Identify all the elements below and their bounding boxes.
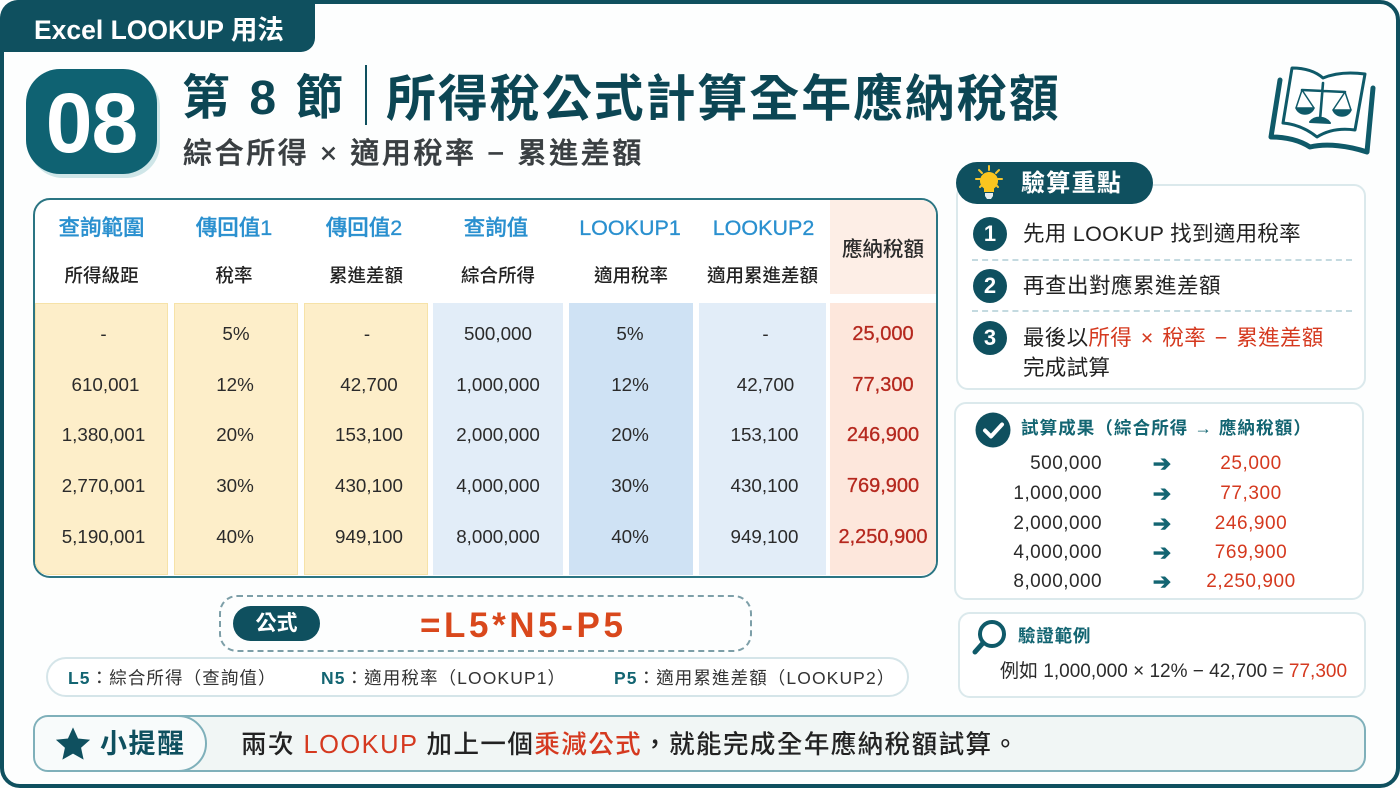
header: 查詢範圍: 查詢範圍 [58, 216, 144, 240]
icon: magnifier [972, 620, 1006, 654]
column: progressive differences: 153,100 [335, 424, 403, 445]
column: income brackets: 1,380,001 [62, 424, 145, 445]
label text: 小提醒 [100, 729, 186, 759]
column: progressive differences: 430,100 [335, 475, 403, 496]
column: income brackets: 610,001 [72, 374, 139, 395]
incomes: 2,000,000 [1013, 513, 1102, 534]
result rows [1013, 451, 1296, 594]
tax values: 2,250,900 [1206, 571, 1296, 592]
header: LOOKUP1: LOOKUP1 [579, 216, 681, 240]
column: tax payable: 769,900 [847, 475, 919, 497]
header: 查詢值: 查詢值 [464, 216, 528, 240]
step 3 [973, 321, 1324, 380]
column: gross income [433, 303, 563, 575]
tax values: 77,300 [1220, 483, 1282, 504]
column: gross income: 2,000,000 [456, 424, 540, 445]
column: income brackets: 2,770,001 [62, 475, 145, 496]
arrows [1153, 451, 1171, 594]
subheader: 綜合所得: 綜合所得 [461, 265, 535, 286]
column: income brackets: - [100, 323, 107, 344]
step number 3: 3 [984, 325, 996, 350]
formula tag: 公式 [256, 612, 298, 635]
verification heading pill [956, 162, 1153, 204]
header: 應納稅額: 應納稅額 [842, 238, 924, 261]
column: gross income: 8,000,000 [456, 526, 540, 547]
header tab [0, 0, 315, 52]
example heading: 驗證範例 [1018, 626, 1091, 646]
step text 3 second line: 完成試算 [1023, 356, 1110, 380]
step number 1 [973, 217, 1007, 251]
tax values: 769,900 [1215, 542, 1287, 563]
example calculation: 例如 1,000,000 × 12% − 42,700 = 77,300 [1000, 661, 1347, 682]
icon: check circle [976, 412, 1010, 448]
panel: verification example [958, 612, 1366, 698]
column: lookup rate: 5% [616, 323, 644, 344]
panel: verification points [956, 184, 1366, 390]
column: tax payable: 25,000 [852, 323, 914, 345]
step text 3: 最後以所得 × 稅率 − 累進差額 [1023, 326, 1324, 350]
legend L5: L5：綜合所得（查詢值） [68, 668, 277, 688]
arrows: ➔ [1153, 540, 1171, 565]
header: LOOKUP2: LOOKUP2 [713, 216, 814, 240]
column: gross income: 500,000 [464, 323, 532, 344]
column: progressive differences: - [364, 323, 370, 344]
column headers [58, 216, 924, 286]
tax values: 246,900 [1215, 513, 1287, 534]
section number badge [26, 69, 157, 174]
incomes: 500,000 [1030, 453, 1102, 474]
icon: light bulb [975, 165, 1003, 199]
heading text: 驗算重點 [1021, 170, 1122, 197]
reminder bar [33, 715, 1366, 772]
formula legend [46, 657, 909, 697]
column: tax payable: 77,300 [852, 374, 914, 396]
column: lookup rate [569, 303, 693, 575]
column: progressive differences [304, 303, 428, 575]
step number 1: 1 [984, 221, 996, 246]
subheader: 適用累進差額: 適用累進差額 [707, 265, 818, 286]
tab label: Excel LOOKUP 用法 [34, 15, 284, 45]
title: main: 所得稅公式計算全年應納稅額 [386, 71, 1061, 127]
column: tax payable: 2,250,900 [838, 526, 927, 548]
column: tax rates: 20% [216, 424, 254, 445]
legend P5: P5：適用累進差額（LOOKUP2） [614, 668, 895, 688]
header: 傳回值2: 傳回值2 [326, 216, 402, 240]
column: income brackets: 5,190,001 [62, 526, 145, 547]
subtitle: 綜合所得 × 適用稅率 − 累進差額 [183, 138, 644, 170]
formula box [219, 595, 752, 652]
incomes [1013, 453, 1102, 592]
step number 3 [973, 321, 1007, 355]
title: section: 第 8 節 [182, 72, 346, 125]
formula expression: =L5*N5-P5 [420, 606, 627, 645]
arrows: ➔ [1153, 451, 1171, 476]
reminder label [33, 715, 207, 772]
tax amount header background [830, 200, 936, 294]
column: tax rates: 30% [216, 475, 254, 496]
icon: law book with scales [1268, 66, 1376, 154]
step number 2 [973, 269, 1007, 303]
subheader: 稅率: 稅率 [215, 265, 252, 286]
incomes: 4,000,000 [1013, 542, 1102, 563]
column: tax rates [174, 303, 298, 575]
column: tax rates: 40% [216, 526, 254, 547]
column: lookup difference [699, 303, 826, 575]
column: tax rates: 12% [216, 374, 254, 395]
column: tax rates: 5% [222, 323, 250, 344]
column: lookup difference: 949,100 [731, 526, 798, 547]
reminder text: 兩次 LOOKUP 加上一個乘減公式，就能完成全年應納稅額試算。 [241, 731, 1019, 759]
header: 傳回值1: 傳回值1 [196, 216, 272, 240]
column: lookup rate: 20% [611, 424, 649, 445]
column: lookup difference: 42,700 [737, 374, 794, 395]
arrows: ➔ [1153, 511, 1171, 536]
arrows: ➔ [1153, 569, 1171, 594]
column: gross income: 1,000,000 [456, 374, 540, 395]
step text 2: 再查出對應累進差額 [1023, 274, 1221, 298]
column: lookup difference: - [762, 323, 769, 344]
column: tax payable [830, 303, 936, 575]
step 1 [973, 217, 1301, 251]
arrows: ➔ [1153, 481, 1171, 506]
panel: results [954, 402, 1364, 600]
incomes: 1,000,000 [1013, 483, 1102, 504]
title divider [365, 65, 367, 125]
legend N5: N5：適用稅率（LOOKUP1） [321, 668, 566, 688]
step number 2: 2 [984, 273, 996, 298]
results heading: 試算成果（綜合所得 → 應納稅額） [1021, 418, 1312, 438]
step 2 [973, 269, 1221, 303]
panel: lookup table [33, 198, 938, 578]
step text 1: 先用 LOOKUP 找到適用稅率 [1023, 222, 1301, 246]
column: income brackets [35, 303, 168, 575]
incomes: 8,000,000 [1013, 571, 1102, 592]
column: lookup rate: 40% [611, 526, 649, 547]
column: lookup difference: 430,100 [731, 475, 798, 496]
column: lookup difference: 153,100 [731, 424, 798, 445]
tax values [1206, 453, 1296, 592]
section number: 08 [46, 76, 137, 170]
icon: star [56, 728, 90, 760]
subheader: 所得級距: 所得級距 [64, 265, 138, 286]
subheader: 適用稅率: 適用稅率 [594, 265, 668, 286]
column: tax payable: 246,900 [847, 424, 919, 446]
column: progressive differences: 949,100 [335, 526, 403, 547]
column: lookup rate: 12% [611, 374, 649, 395]
column: gross income: 4,000,000 [456, 475, 540, 496]
subheader: 累進差額: 累進差額 [329, 265, 403, 286]
formula tag [233, 606, 320, 641]
column: progressive differences: 42,700 [340, 374, 398, 395]
column: lookup rate: 30% [611, 475, 649, 496]
tax values: 25,000 [1220, 453, 1282, 474]
